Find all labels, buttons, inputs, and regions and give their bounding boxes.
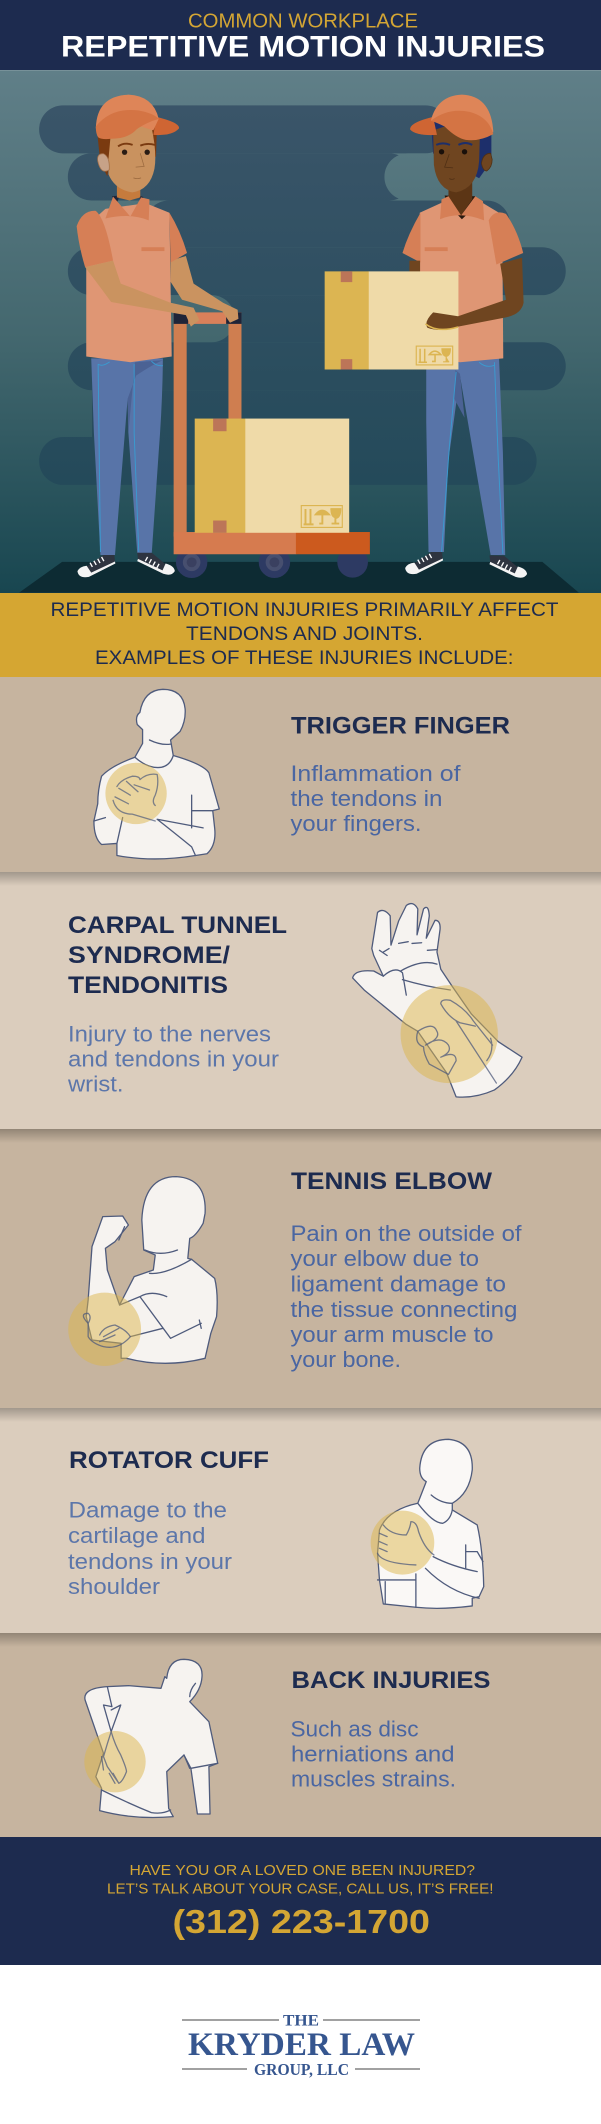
panel: trigger finger [0,677,601,872]
description: trigger finger: your fingers. [290,811,422,836]
worker left shoes [77,552,175,577]
worker left trousers [91,358,163,555]
intro band: TENDONS AND JOINTS. [186,624,423,645]
heading: back injuries: BACK INJURIES [292,1667,490,1694]
description: tennis elbow [290,1221,522,1372]
call to action text [107,1863,494,1898]
description: carpal tunnel: and tendons in your [68,1046,279,1072]
title: common workplace: COMMON WORKPLACE [188,10,418,32]
worker left arm (front) [85,261,199,327]
worker right trousers [426,358,505,555]
phone number: (312) 223-1700 [172,1903,430,1940]
worker right head [410,95,493,220]
logo: the kryder law group: GROUP, LLC [254,2060,349,2079]
title banner [0,0,601,70]
worker left head [96,95,179,220]
heading: tennis elbow: TENNIS ELBOW [291,1168,492,1195]
worker right shirt [420,203,503,362]
cart box [195,419,349,533]
description: carpal tunnel [67,1022,279,1096]
hero illustration: two workers with cart and boxes [0,70,601,594]
panel: back injuries [0,1633,601,1837]
description: carpal tunnel: Injury to the nerves [68,1022,271,1046]
logo: the kryder law group: KRYDER LAW [188,2027,415,2063]
description: tennis elbow: your elbow due to [290,1246,479,1271]
logo: the kryder law group [182,2012,420,2079]
title: repetitive motion injuries: REPETITIVE MOTION INJURIES [61,30,545,64]
description: rotator cuff: Damage to the [68,1498,227,1522]
icon: person holding fingers [94,689,219,859]
description: rotator cuff: cartilage and [68,1523,206,1548]
intro band [0,593,601,677]
worker left arm (rear) [171,256,238,323]
logo: the kryder law group: THE [283,2012,319,2030]
description: tennis elbow: ligament damage to [290,1272,506,1296]
worker right arm [489,212,523,264]
heading: carpal tunnel syndrome / tendonitis: SYNDROME/ [68,942,230,969]
heading: carpal tunnel syndrome / tendonitis [68,912,287,999]
panel: tennis elbow [0,1129,601,1408]
worker left shirt [86,203,172,362]
icon: hand with gripped wrist [353,904,522,1097]
description: tennis elbow: your arm muscle to [290,1322,494,1347]
worker right [325,95,527,578]
description: tennis elbow: the tissue connecting [290,1297,518,1322]
worker right shoes [405,551,527,578]
description: back injuries [290,1716,456,1792]
description: rotator cuff: tendons in your [68,1549,232,1574]
description: back injuries: muscles strains. [291,1766,456,1792]
call to action [0,1837,601,1965]
heading: carpal tunnel syndrome / tendonitis: TENDONITIS [68,972,228,999]
call to action text: HAVE YOU OR A LOVED ONE BEEN INJURED? [130,1863,475,1879]
description: back injuries: Such as disc [290,1716,418,1742]
worker left [77,95,238,577]
description: tennis elbow: your bone. [290,1347,401,1372]
call to action text: LET’S TALK ABOUT YOUR CASE, CALL US, IT’S FREE! [107,1882,494,1898]
description: rotator cuff: shoulder [68,1574,160,1599]
description: tennis elbow: Pain on the outside of [290,1221,522,1246]
icon: person holding elbow [68,1177,217,1366]
panel: rotator cuff [0,1408,601,1633]
heading: rotator cuff: ROTATOR CUFF [69,1447,269,1474]
description: rotator cuff [68,1498,232,1599]
description: back injuries: herniations and [291,1742,454,1766]
description: carpal tunnel: wrist. [67,1072,124,1096]
heading: trigger finger: TRIGGER FINGER [291,712,510,740]
icon: person holding shoulder [371,1439,484,1608]
icon: person holding lower back [84,1659,218,1818]
cart [174,312,370,578]
description: trigger finger: Inflammation of [290,761,461,786]
intro band: EXAMPLES OF THESE INJURIES INCLUDE: [95,648,514,669]
description: trigger finger: the tendons in [290,786,442,811]
intro band: REPETITIVE MOTION INJURIES PRIMARILY AFFECT [50,600,559,621]
description: trigger finger [290,761,461,836]
panel: carpal tunnel [0,872,601,1129]
heading: carpal tunnel syndrome / tendonitis: CARPAL TUNNEL [68,912,287,939]
worker right box [325,271,458,370]
